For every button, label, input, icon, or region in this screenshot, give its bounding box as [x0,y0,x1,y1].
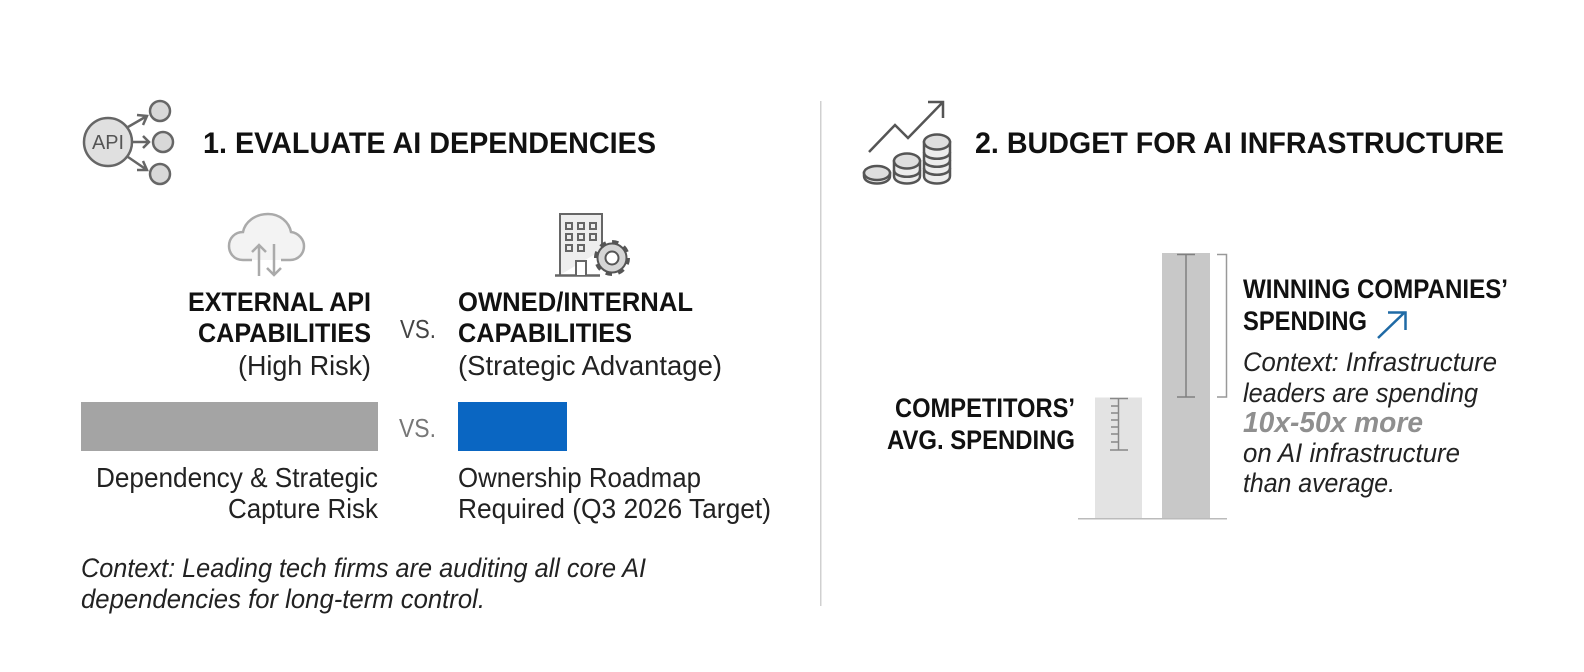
text: infrastructure context [1243,347,1497,498]
icon: API network [84,101,173,184]
text: context note: Context: Leading tech firms are auditing all core AI [81,553,646,583]
label: external API capabilities [188,287,371,381]
label: external API capabilities: CAPABILITIES [198,318,371,348]
bar: dependency risk [81,402,378,451]
icon: coins with rising arrow [864,102,950,184]
bar chart: spending comparison [1078,253,1227,520]
heading: section 1: 1. EVALUATE AI DEPENDENCIES [203,127,656,160]
label: owned internal capabilities: (Strategic Advantage) [458,350,722,381]
panel: budget for AI infrastructure [864,102,1508,520]
panel: evaluate AI dependencies [81,101,771,614]
icon: blue rising arrow [1378,312,1406,338]
text: infrastructure context: leaders are spending [1243,378,1478,408]
text: dependency caption: Dependency & Strategic [96,462,378,493]
text: dependency caption: Capture Risk [228,493,379,524]
text: context note: dependencies for long-term control. [81,584,485,614]
text: infrastructure context: on AI infrastructure [1243,438,1460,468]
text: context note [81,553,646,614]
label: external API capabilities: (High Risk) [238,350,371,381]
text: infrastructure context: than average. [1243,468,1395,498]
bar: ownership roadmap [458,402,567,451]
label: winning companies spending: WINNING COMPANIES’ [1243,274,1508,304]
scale: competitors ticks [1110,398,1128,450]
bar: competitors [1095,398,1142,518]
text: ownership caption: Required (Q3 2026 Target) [458,493,771,524]
icon: building with gear [555,214,628,276]
label: competitors average spending: COMPETITORS’ [895,393,1075,423]
label: external API capabilities: EXTERNAL API [188,287,371,317]
text: ownership caption: Ownership Roadmap [458,462,701,493]
scale: winning range [1177,254,1195,397]
text: versus for bars: VS. [399,413,436,443]
heading: section 2: 2. BUDGET FOR AI INFRASTRUCTURE [975,127,1504,160]
label: owned internal capabilities [458,287,722,381]
text: versus: VS. [400,314,436,344]
icon: cloud with up and down arrows [229,214,304,276]
bar: winning companies [1162,253,1210,518]
label: owned internal capabilities: OWNED/INTERNAL [458,287,693,317]
label: winning companies spending: SPENDING [1243,306,1367,336]
bracket: difference [1217,254,1226,397]
label: competitors average spending: AVG. SPENDING [887,425,1075,455]
label: owned internal capabilities: CAPABILITIES [458,318,632,348]
label: competitors average spending [887,393,1075,455]
text: infrastructure context: Context: Infrastructure [1243,347,1497,377]
text: dependency caption [96,462,379,524]
text: ownership caption [458,462,771,524]
text: infrastructure context: 10x-50x more [1243,407,1423,439]
icon: API network: API [92,132,124,154]
label: winning companies spending [1243,274,1508,338]
